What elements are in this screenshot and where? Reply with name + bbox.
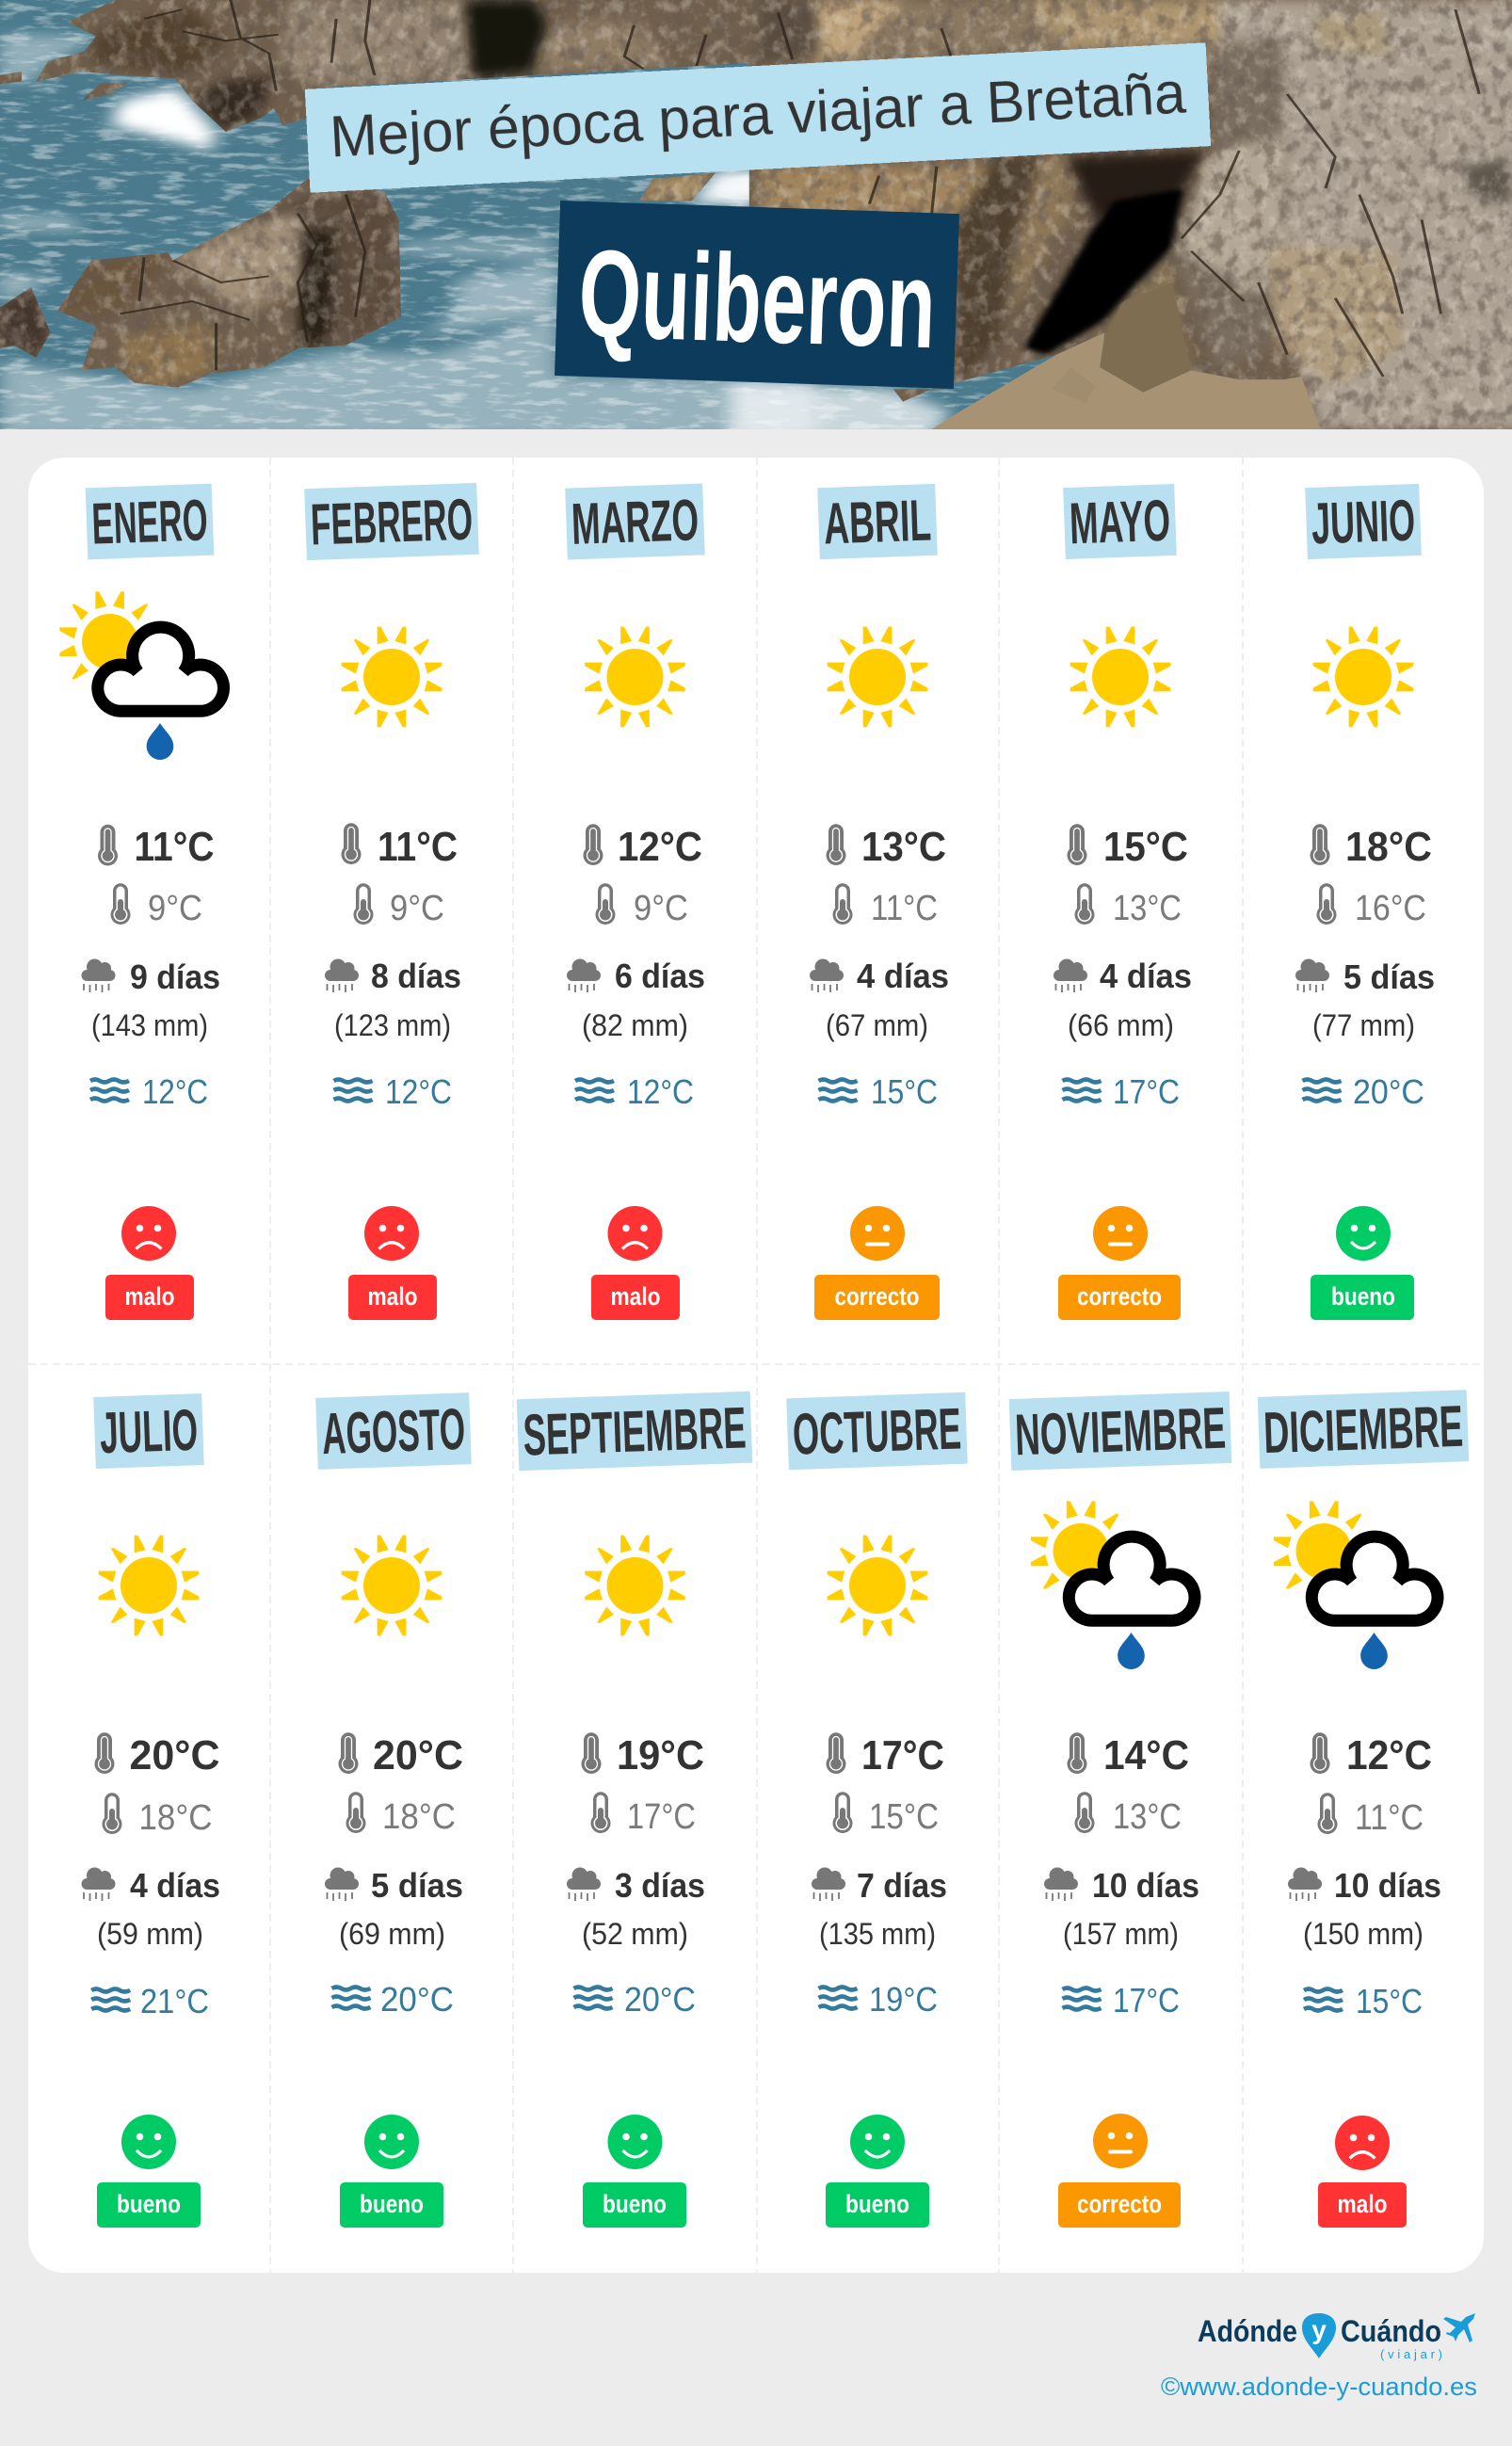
max temperature: 11°C <box>378 824 458 870</box>
rainy days: 8 días <box>371 957 461 995</box>
rainy days <box>810 957 949 995</box>
icon: sun <box>585 627 685 727</box>
max temperature <box>584 824 702 870</box>
title banner: Quiberon <box>577 224 938 374</box>
rating: correcto: correcto <box>1077 1282 1162 1311</box>
rating: malo: malo <box>124 1282 175 1311</box>
label: Septiembre: SEPTIEMBRE <box>522 1395 748 1469</box>
sea temperature <box>574 1980 696 2019</box>
label: Abril: ABRIL <box>823 489 932 556</box>
month: Octubre <box>786 1392 968 2228</box>
sea temperature <box>819 1980 938 2019</box>
max temperature <box>582 1732 704 1778</box>
sea temperature: 20°C <box>624 1980 696 2019</box>
month: Enero <box>59 484 224 1320</box>
label: Enero <box>86 484 214 559</box>
max temperature <box>98 824 215 870</box>
max temperature <box>1311 824 1432 870</box>
rainy days: 4 días <box>1100 957 1192 995</box>
icon: map pin <box>1302 2313 1336 2358</box>
rating: correcto: correcto <box>1077 2190 1162 2218</box>
rainy days <box>1288 1866 1441 1905</box>
label: Marzo <box>565 483 705 560</box>
logo: Adónde y Cuándo <box>1198 2313 1475 2361</box>
rating: malo <box>348 1206 437 1320</box>
min temperature: 18°C <box>139 1798 213 1838</box>
rainy days: 5 días <box>1343 957 1435 996</box>
min temperature: 13°C <box>1113 1797 1182 1837</box>
rating: correcto <box>1058 1206 1181 1320</box>
min temperature: 9°C <box>148 889 202 928</box>
rainy days <box>812 1866 947 1905</box>
min temperature <box>346 1792 456 1837</box>
label: Mayo: MAYO <box>1069 489 1171 556</box>
rating: malo: malo <box>367 1282 418 1311</box>
max temperature: 17°C <box>861 1732 944 1778</box>
month: Abril <box>810 484 949 1320</box>
rating: correcto: correcto <box>834 1282 919 1311</box>
label: Septiembre <box>517 1392 752 1471</box>
sea temperature: 12°C <box>142 1072 208 1111</box>
sea temperature <box>819 1072 938 1111</box>
label: Julio <box>93 1393 204 1469</box>
rainfall: (67 mm) <box>826 1008 928 1042</box>
rainfall: (143 mm) <box>91 1008 208 1042</box>
month: Julio <box>81 1393 220 2228</box>
icon: sun <box>585 1536 685 1635</box>
rating: malo <box>1318 2116 1407 2228</box>
sea temperature <box>1303 1072 1424 1111</box>
label: Agosto: AGOSTO <box>321 1397 466 1467</box>
rainfall: (52 mm) <box>582 1917 688 1951</box>
min temperature <box>1075 883 1182 928</box>
rainy days: 6 días <box>615 957 705 995</box>
min temperature: 11°C <box>1355 1798 1424 1838</box>
icon: sun <box>99 1536 199 1635</box>
rainy days <box>325 1866 463 1905</box>
sea temperature: 17°C <box>1113 1981 1180 2020</box>
rating: bueno: bueno <box>360 2190 424 2218</box>
max temperature: 14°C <box>1103 1732 1189 1778</box>
min temperature: 13°C <box>1113 889 1182 928</box>
rainy days <box>1044 1866 1199 1905</box>
label: Enero: ENERO <box>90 488 209 557</box>
rainy days <box>325 957 461 995</box>
label: Octubre: OCTUBRE <box>792 1396 962 1468</box>
panel: monthly climate table <box>28 458 1484 2273</box>
sea temperature <box>1304 1982 1423 2020</box>
month: Febrero <box>304 483 479 1320</box>
max temperature <box>827 824 946 870</box>
logo: Adónde y Cuándo: Cuándo <box>1341 2314 1441 2348</box>
sea temperature: 12°C <box>627 1072 694 1111</box>
rainy days: 10 días <box>1334 1866 1441 1905</box>
rainy days: 7 días <box>857 1866 947 1905</box>
icon: sun and cloud with rain <box>59 591 224 760</box>
sea temperature: 15°C <box>1356 1982 1423 2020</box>
rating: bueno <box>826 2115 929 2228</box>
min temperature: 18°C <box>382 1797 456 1837</box>
max temperature <box>1311 1732 1432 1778</box>
max temperature: 13°C <box>861 824 946 870</box>
rainy days: 9 días <box>130 957 220 996</box>
min temperature: 16°C <box>1355 889 1426 928</box>
max temperature <box>1068 824 1188 870</box>
max temperature: 11°C <box>134 824 215 870</box>
logo: Adónde y Cuándo: (viajar) <box>1380 2347 1442 2361</box>
icon: sun <box>1070 627 1170 727</box>
rating: malo <box>105 1206 194 1320</box>
icon: sun <box>828 627 927 727</box>
rating: malo: malo <box>610 1282 661 1311</box>
min temperature <box>354 883 444 928</box>
rainy days <box>1054 957 1192 995</box>
min temperature <box>111 883 202 928</box>
rating: bueno: bueno <box>603 2190 667 2218</box>
rainfall: (150 mm) <box>1303 1917 1424 1951</box>
min temperature <box>1318 1793 1424 1838</box>
sea temperature: 21°C <box>140 1982 209 2020</box>
icon: sun and cloud with rain <box>1274 1501 1438 1669</box>
max temperature: 12°C <box>1346 1732 1432 1778</box>
sea temperature: 19°C <box>869 1980 938 2019</box>
min temperature <box>1075 1792 1182 1837</box>
subtitle banner: Mejor época para viajar a Bretaña <box>329 60 1188 170</box>
rainy days <box>567 1866 705 1905</box>
sea temperature <box>1062 1981 1180 2020</box>
sea temperature: 17°C <box>1113 1072 1180 1111</box>
rating: bueno <box>583 2115 686 2228</box>
min temperature: 9°C <box>634 889 688 928</box>
sea temperature <box>90 1072 208 1111</box>
icon: map pin: y <box>1311 2315 1327 2344</box>
rainfall: (157 mm) <box>1063 1917 1179 1951</box>
label: Mayo <box>1063 484 1177 559</box>
month: Septiembre <box>517 1392 752 2228</box>
max temperature: 20°C <box>373 1732 463 1778</box>
min temperature <box>832 883 938 928</box>
max temperature: 19°C <box>617 1732 704 1778</box>
max temperature: 12°C <box>618 824 702 870</box>
max temperature: 18°C <box>1345 824 1432 870</box>
rainy days <box>81 957 220 996</box>
min temperature: 11°C <box>871 889 938 928</box>
rating: bueno: bueno <box>845 2190 909 2218</box>
rainy days <box>567 957 705 995</box>
min temperature <box>102 1793 213 1838</box>
icon: plane <box>1443 2313 1475 2342</box>
label: Abril <box>817 484 938 559</box>
rainfall: (77 mm) <box>1312 1008 1415 1042</box>
rating: malo <box>591 1206 680 1320</box>
min temperature <box>1316 883 1426 928</box>
label: Noviembre <box>1009 1392 1231 1471</box>
rainy days: 5 días <box>371 1866 463 1905</box>
label: Noviembre: NOVIEMBRE <box>1014 1396 1227 1468</box>
sea temperature <box>1062 1072 1180 1111</box>
month: Agosto <box>315 1392 472 2228</box>
label: Junio: JUNIO <box>1311 489 1416 556</box>
rainy days: 4 días <box>130 1866 220 1905</box>
rainy days <box>1295 957 1435 996</box>
max temperature <box>827 1732 944 1778</box>
label: Febrero <box>304 483 479 560</box>
rating: bueno <box>97 2115 201 2228</box>
rainy days <box>81 1866 220 1905</box>
label: Julio: JULIO <box>99 1398 199 1466</box>
hero photo: Quiberon coast <box>0 0 1512 440</box>
label: Agosto <box>315 1392 472 1470</box>
max temperature: 15°C <box>1103 824 1188 870</box>
month: Marzo <box>565 483 705 1320</box>
sea temperature: 20°C <box>380 1980 454 2019</box>
min temperature: 9°C <box>390 889 444 928</box>
website credit: ©www.adonde-y-cuando.es <box>1161 2373 1477 2401</box>
month: Noviembre <box>1009 1392 1231 2228</box>
max temperature: 20°C <box>130 1732 220 1778</box>
sea temperature <box>333 1072 452 1111</box>
icon: sun <box>342 1536 442 1635</box>
rating: bueno <box>1311 1206 1414 1320</box>
rainy days: 3 días <box>615 1866 705 1905</box>
sea temperature <box>331 1980 454 2019</box>
rainfall: (123 mm) <box>334 1008 451 1042</box>
label: Marzo: MARZO <box>571 488 700 557</box>
rainfall: (82 mm) <box>582 1008 688 1042</box>
rating: malo: malo <box>1337 2190 1388 2218</box>
rating: bueno: bueno <box>117 2190 181 2218</box>
label: Febrero: FEBRERO <box>310 488 474 557</box>
sea temperature: 15°C <box>871 1072 938 1111</box>
sea temperature: 12°C <box>385 1072 452 1111</box>
month: Diciembre <box>1258 1390 1469 2228</box>
sea temperature: 20°C <box>1353 1072 1424 1111</box>
max temperature <box>1068 1732 1189 1778</box>
icon: sun <box>828 1536 927 1635</box>
label: Octubre <box>786 1392 968 1470</box>
rating: correcto <box>1058 2114 1181 2228</box>
rating: correcto <box>814 1206 940 1320</box>
min temperature <box>591 1792 696 1837</box>
icon: sun and cloud with rain <box>1031 1501 1195 1669</box>
rainfall: (135 mm) <box>819 1917 936 1951</box>
sea temperature <box>91 1982 209 2020</box>
min temperature <box>832 1792 939 1837</box>
icon: sun <box>1313 627 1413 727</box>
icon: sun <box>342 627 442 727</box>
rating: bueno <box>340 2115 443 2228</box>
month: Junio <box>1295 484 1435 1320</box>
min temperature <box>595 883 688 928</box>
min temperature: 17°C <box>627 1797 696 1837</box>
max temperature <box>341 823 458 870</box>
label: Junio <box>1305 484 1422 559</box>
title banner <box>555 201 959 389</box>
rating: bueno: bueno <box>1331 1282 1395 1311</box>
rainfall: (59 mm) <box>97 1917 203 1951</box>
logo: Adónde y Cuándo: Adónde <box>1198 2314 1297 2348</box>
rainfall: (66 mm) <box>1068 1008 1174 1042</box>
sea temperature <box>575 1072 694 1111</box>
rainfall: (69 mm) <box>339 1917 445 1951</box>
month: Mayo <box>1054 484 1192 1320</box>
rainy days: 4 días <box>857 957 949 995</box>
rainy days: 10 días <box>1092 1866 1199 1905</box>
min temperature: 15°C <box>869 1797 939 1837</box>
